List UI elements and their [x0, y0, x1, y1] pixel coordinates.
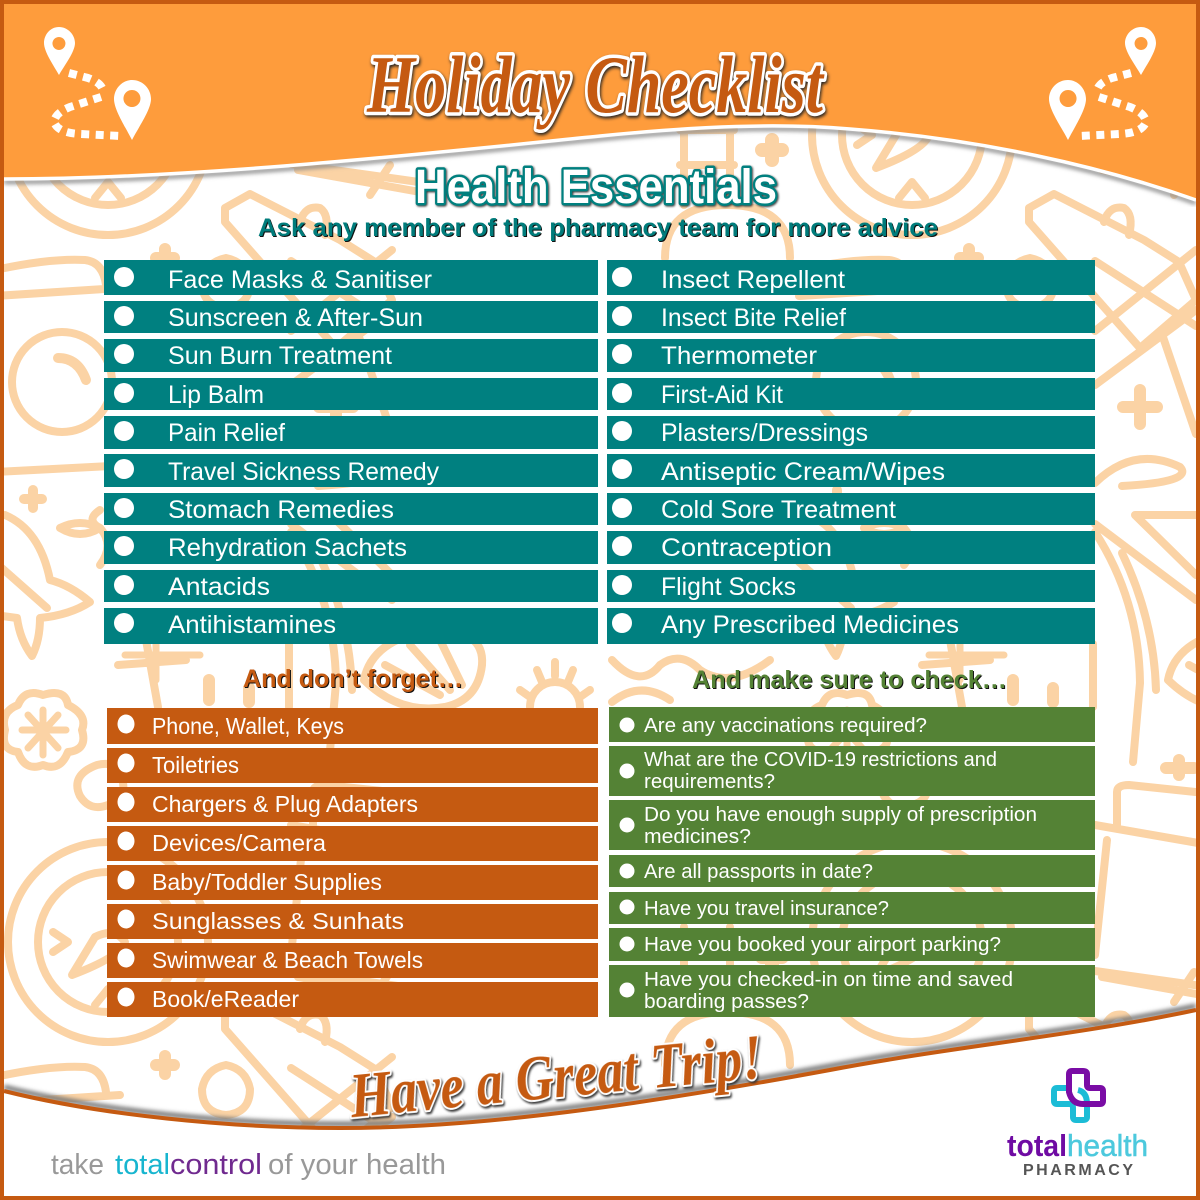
title: Holiday Checklist	[366, 39, 825, 130]
row: airport parking: Have you booked your airport parking?	[644, 934, 1001, 956]
row: prescribed medicines: Any Prescribed Medicines	[661, 611, 959, 639]
row: rehydration: Rehydration Sachets	[168, 534, 407, 562]
tagline: total	[115, 1149, 170, 1181]
panel: health essentials left list	[104, 260, 598, 644]
row: antacids	[104, 570, 598, 602]
row: vaccinations	[609, 707, 1095, 742]
row: travel insurance: Have you travel insurance?	[644, 898, 889, 920]
logo wordmark: total	[1007, 1128, 1067, 1163]
row: insect repellent: Insect Repellent	[661, 266, 845, 294]
row: passports	[609, 855, 1095, 887]
row: rehydration	[104, 531, 598, 564]
row: sun burn	[104, 339, 598, 372]
row: insect bite	[607, 301, 1095, 333]
row: swimwear	[107, 943, 598, 978]
row: face masks	[104, 260, 598, 295]
row: face masks: Face Masks & Sanitiser	[168, 266, 432, 294]
row: sun burn: Sun Burn Treatment	[168, 342, 392, 370]
row: antiseptic	[607, 454, 1095, 487]
row: phone: Phone, Wallet, Keys	[152, 713, 344, 739]
row: sunscreen: Sunscreen & After-Sun	[168, 304, 423, 332]
header banner	[4, 4, 1196, 203]
row: antiseptic: Antiseptic Cream/Wipes	[661, 458, 945, 486]
row: insect repellent	[607, 260, 1095, 295]
row: prescription supply	[609, 800, 1095, 850]
tagline: of your health	[268, 1149, 446, 1181]
row: antacids: Antacids	[168, 573, 270, 601]
row: phone	[107, 708, 598, 744]
row: flight socks: Flight Socks	[661, 573, 796, 601]
row: vaccinations: Are any vaccinations required?	[644, 715, 927, 737]
tagline: control	[170, 1149, 262, 1181]
row: prescription supply: medicines?	[644, 826, 751, 848]
row: boarding passes	[609, 965, 1095, 1017]
row: devices: Devices/Camera	[152, 830, 326, 856]
heading: and make sure to check: And make sure to check…	[692, 666, 1007, 694]
row: prescribed medicines	[607, 608, 1095, 644]
row: stomach remedies	[104, 493, 598, 525]
row: cold sore	[607, 493, 1095, 525]
row: lip balm	[104, 378, 598, 410]
row: pain relief	[104, 416, 598, 449]
row: cold sore: Cold Sore Treatment	[661, 496, 896, 524]
row: travel sickness: Travel Sickness Remedy	[168, 458, 439, 486]
row: contraception	[607, 531, 1095, 564]
row: sunscreen	[104, 301, 598, 333]
row: plasters: Plasters/Dressings	[661, 419, 868, 447]
row: chargers	[107, 787, 598, 822]
row: contraception: Contraception	[661, 534, 832, 562]
row: sunglasses	[107, 904, 598, 939]
heading: and don't forget: And don’t forget…	[243, 665, 463, 693]
row: plasters	[607, 416, 1095, 449]
row: chargers: Chargers & Plug Adapters	[152, 791, 418, 817]
panel: make sure to check list	[609, 707, 1095, 1017]
tagline	[51, 1149, 446, 1181]
row: antihistamines: Antihistamines	[168, 611, 336, 639]
logo: total health pharmacy	[1007, 1071, 1148, 1179]
row: book: Book/eReader	[152, 986, 299, 1012]
row: boarding passes: Have you checked-in on time and saved	[644, 969, 1013, 991]
row: covid restrictions: What are the COVID-19 restrictions and	[644, 749, 997, 771]
row: passports: Are all passports in date?	[644, 861, 873, 883]
row: lip balm: Lip Balm	[168, 381, 264, 409]
row: covid restrictions: requirements?	[644, 771, 775, 793]
row: pain relief: Pain Relief	[168, 419, 285, 447]
row: toiletries	[107, 748, 598, 783]
row: sunglasses: Sunglasses & Sunhats	[152, 908, 404, 934]
tagline: take	[51, 1149, 104, 1181]
panel: don't forget list	[107, 708, 598, 1017]
icon: map route left	[44, 27, 151, 140]
row: first-aid kit	[607, 378, 1095, 410]
row: insect bite: Insect Bite Relief	[661, 304, 846, 332]
row: toiletries: Toiletries	[152, 752, 239, 778]
logo subtitle: PHARMACY	[1023, 1162, 1133, 1179]
row: book	[107, 982, 598, 1017]
row: travel insurance	[609, 892, 1095, 924]
footer white band with curved rule	[4, 1006, 1196, 1196]
subheading: advice: Ask any member of the pharmacy team for more advice	[258, 214, 938, 242]
row: prescription supply: Do you have enough supply of prescription	[644, 804, 1037, 826]
row: baby	[107, 865, 598, 900]
row: boarding passes: boarding passes?	[644, 991, 809, 1013]
row: devices	[107, 826, 598, 861]
row: swimwear: Swimwear & Beach Towels	[152, 947, 423, 973]
closing message: Have a Great Trip!	[346, 1021, 765, 1131]
row: travel sickness	[104, 454, 598, 487]
logo wordmark	[1007, 1128, 1148, 1163]
icon: cross	[1054, 1071, 1103, 1120]
row: airport parking	[609, 928, 1095, 961]
row: thermometer: Thermometer	[661, 342, 817, 370]
row: stomach remedies: Stomach Remedies	[168, 496, 394, 524]
icon: map route right	[1049, 27, 1156, 140]
row: flight socks	[607, 570, 1095, 602]
row: baby: Baby/Toddler Supplies	[152, 869, 382, 895]
logo wordmark: health	[1067, 1128, 1148, 1163]
heading: health essentials: Health Essentials	[415, 161, 777, 214]
row: covid restrictions	[609, 746, 1095, 796]
row: thermometer	[607, 339, 1095, 372]
row: first-aid kit: First-Aid Kit	[661, 381, 783, 409]
row: antihistamines	[104, 608, 598, 644]
panel: health essentials right list	[607, 260, 1095, 644]
